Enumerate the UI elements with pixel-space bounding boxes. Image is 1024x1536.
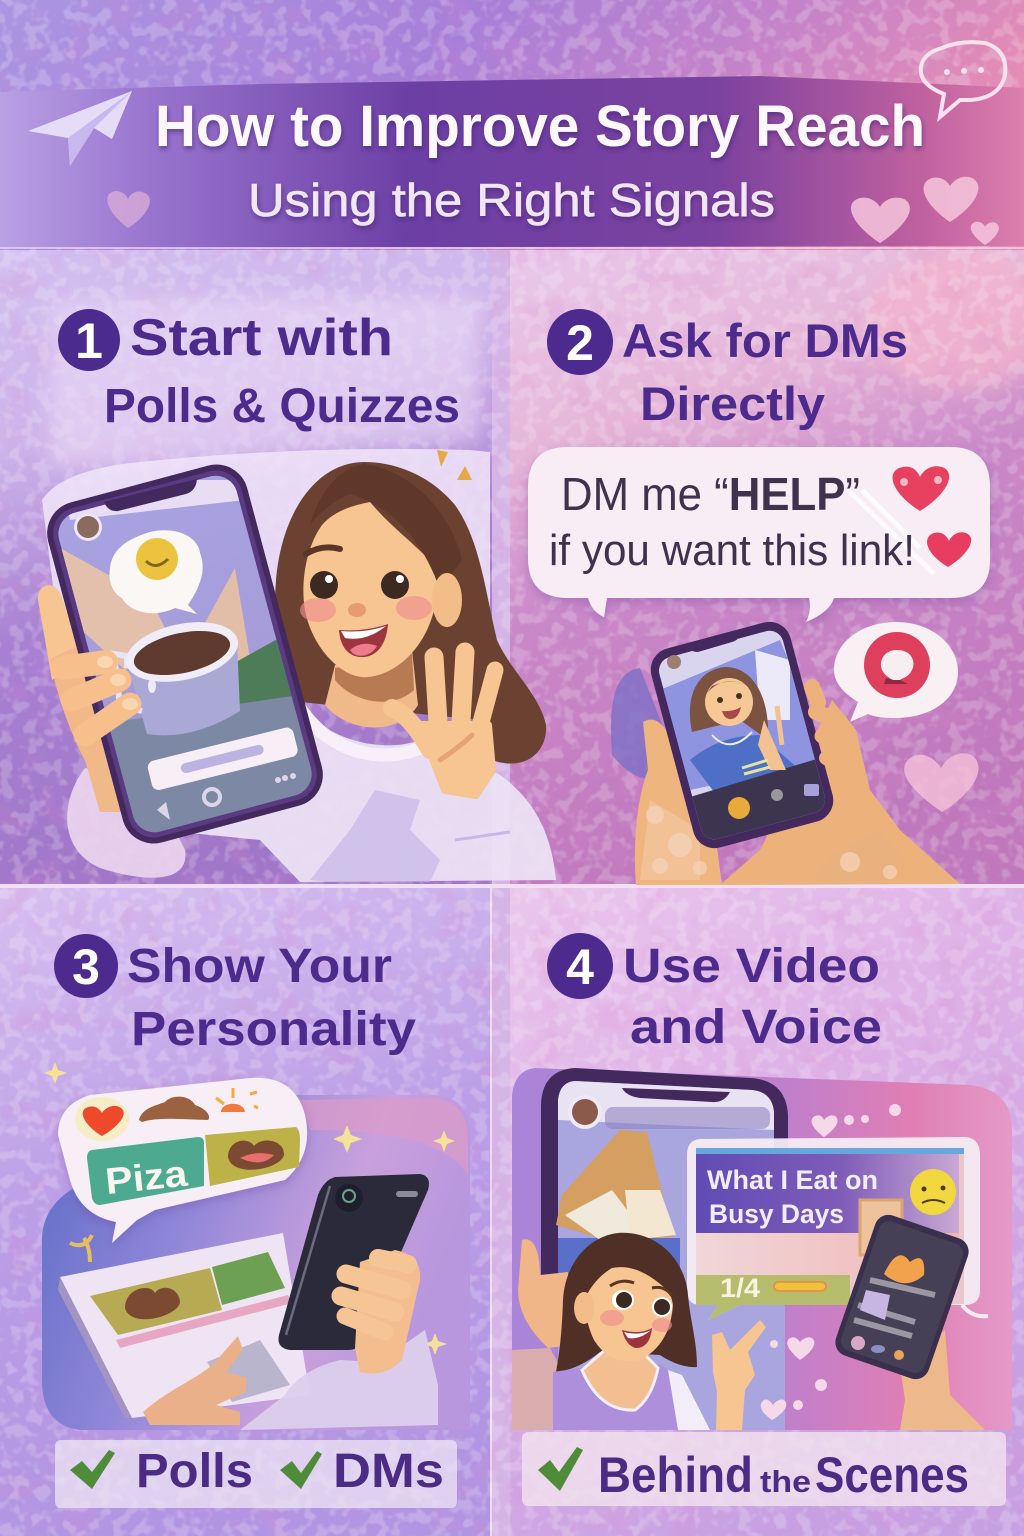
hair xyxy=(275,462,546,764)
heading 4 xyxy=(547,933,882,1054)
finger nails xyxy=(97,656,138,710)
neck xyxy=(325,650,418,728)
big phone xyxy=(541,1068,788,1430)
DM request text: DM me “HELP” xyxy=(561,468,860,520)
heading 1: Start with xyxy=(130,309,393,367)
fingers xyxy=(62,662,130,735)
video card xyxy=(687,1137,988,1320)
DM request text xyxy=(549,468,915,575)
tablet xyxy=(58,1233,310,1418)
thumbs-up hand xyxy=(518,1239,570,1348)
pointing hand xyxy=(712,1320,766,1430)
heading 1: 1 xyxy=(75,313,103,369)
phone 2 xyxy=(650,622,848,848)
illustration backdrop xyxy=(42,449,490,700)
girl waving xyxy=(67,450,556,882)
check: polls xyxy=(70,1450,115,1489)
DM request text: if you want this link! xyxy=(549,526,915,575)
phone 1 notch xyxy=(104,479,197,511)
heading 3: Show Your xyxy=(127,940,392,993)
heading 3 xyxy=(54,934,416,1056)
hands xyxy=(635,700,960,885)
hair fringe xyxy=(585,1250,672,1298)
sparks xyxy=(437,450,472,480)
speckle on hands xyxy=(646,806,897,879)
panel 1 pale backdrop xyxy=(50,296,480,470)
eyes xyxy=(306,547,409,599)
fingers on phone xyxy=(812,687,847,770)
hand on tablet xyxy=(143,1336,247,1425)
ear xyxy=(432,573,462,627)
icon: paper plane xyxy=(28,91,132,166)
avatar xyxy=(74,513,102,541)
phone 1 screen art xyxy=(62,480,312,832)
black phone xyxy=(278,1174,429,1350)
behind the scenes strip xyxy=(522,1432,1006,1506)
heading 1 xyxy=(58,309,460,433)
DMs label: DMs xyxy=(333,1445,444,1498)
arm and hand holding phone xyxy=(38,585,135,812)
white sleeve xyxy=(668,1370,710,1430)
subtitle: Using the Right Signals xyxy=(248,174,775,226)
heading 4: 4 xyxy=(566,939,594,995)
panel 3: show your personality xyxy=(42,934,470,1508)
icon: large heart xyxy=(893,466,949,511)
nose xyxy=(348,603,366,617)
card title: What I Eat on xyxy=(707,1165,878,1195)
polls label: Polls xyxy=(136,1445,253,1498)
check: DMs xyxy=(280,1451,322,1489)
heading 4: Use Video xyxy=(623,940,880,993)
food tent xyxy=(556,1130,673,1240)
food chip xyxy=(205,1127,300,1186)
panel 1: polls and quizzes xyxy=(38,296,556,882)
hand holding phone xyxy=(341,1250,420,1374)
blue shadow shape xyxy=(611,668,680,779)
mouth xyxy=(339,624,388,657)
waving hand xyxy=(392,652,495,795)
girl pointing xyxy=(512,1233,766,1430)
screen girl xyxy=(690,667,768,740)
behind the scenes label: Scenes xyxy=(815,1447,969,1503)
poll bar xyxy=(146,726,299,791)
heading 2: 2 xyxy=(566,315,594,371)
heading 4: and Voice xyxy=(630,1001,882,1054)
emoji xyxy=(910,1169,956,1215)
face xyxy=(586,1262,673,1361)
behind the scenes label xyxy=(598,1447,969,1503)
star accents xyxy=(44,1062,455,1355)
reaction bubble xyxy=(110,530,203,614)
image thumbnail xyxy=(860,1200,902,1255)
story counter: 1/4 xyxy=(720,1273,760,1303)
heading 3: Personality xyxy=(131,1003,416,1056)
check icon xyxy=(538,1447,583,1491)
bangs xyxy=(310,464,462,590)
illustration frame xyxy=(512,1068,1012,1430)
piza speech bubble xyxy=(58,1078,307,1243)
sleeve xyxy=(240,1330,438,1430)
pale heart xyxy=(904,753,979,812)
neckline xyxy=(582,1350,658,1410)
icon: red heart xyxy=(75,1097,129,1141)
glare on bubble xyxy=(848,490,934,574)
coffee cup xyxy=(114,613,244,735)
heading 2: Ask for DMs xyxy=(622,314,908,367)
header band xyxy=(0,42,1024,249)
heading 3: 3 xyxy=(72,939,100,995)
phone 1 controls xyxy=(157,773,296,820)
icon: chat bubble outline xyxy=(921,42,1005,117)
icon: sun xyxy=(216,1088,258,1112)
heading 2: Directly xyxy=(640,377,825,430)
shirt xyxy=(553,1355,682,1430)
phone 2 notch xyxy=(686,630,742,652)
ear xyxy=(574,1292,594,1324)
face xyxy=(303,502,444,677)
heading 1: Polls & Quizzes xyxy=(104,380,460,433)
title: How to Improve Story Reach xyxy=(155,94,925,159)
phone 1 xyxy=(47,464,323,844)
DM speech bubble xyxy=(528,447,990,622)
cheeks xyxy=(300,596,432,622)
cheeks xyxy=(600,1310,672,1332)
eyes xyxy=(610,1281,672,1317)
behind the scenes label: the xyxy=(760,1464,811,1499)
scattered hearts xyxy=(761,1104,901,1420)
panel 2: ask for DMs xyxy=(528,309,990,885)
icon: brown cloud xyxy=(139,1097,209,1122)
mouth xyxy=(622,1328,652,1348)
behind the scenes label: Behind xyxy=(598,1447,753,1503)
sweatshirt xyxy=(67,708,556,882)
progress bar xyxy=(774,1282,826,1291)
small reaction bubble xyxy=(834,622,958,722)
panel 4: use video and voice xyxy=(512,933,1012,1506)
decorative hearts xyxy=(107,177,999,245)
video card: Busy Days xyxy=(709,1199,844,1229)
heading 2 xyxy=(547,309,908,430)
hair xyxy=(556,1233,697,1372)
illustration frame xyxy=(42,1095,470,1430)
piza chip xyxy=(87,1137,204,1205)
small phone with hand xyxy=(832,1210,985,1430)
phone 2 screen art xyxy=(663,640,825,840)
checklist strip xyxy=(55,1440,457,1508)
piza chip: Piza xyxy=(103,1153,190,1202)
icon: small heart xyxy=(927,532,971,567)
